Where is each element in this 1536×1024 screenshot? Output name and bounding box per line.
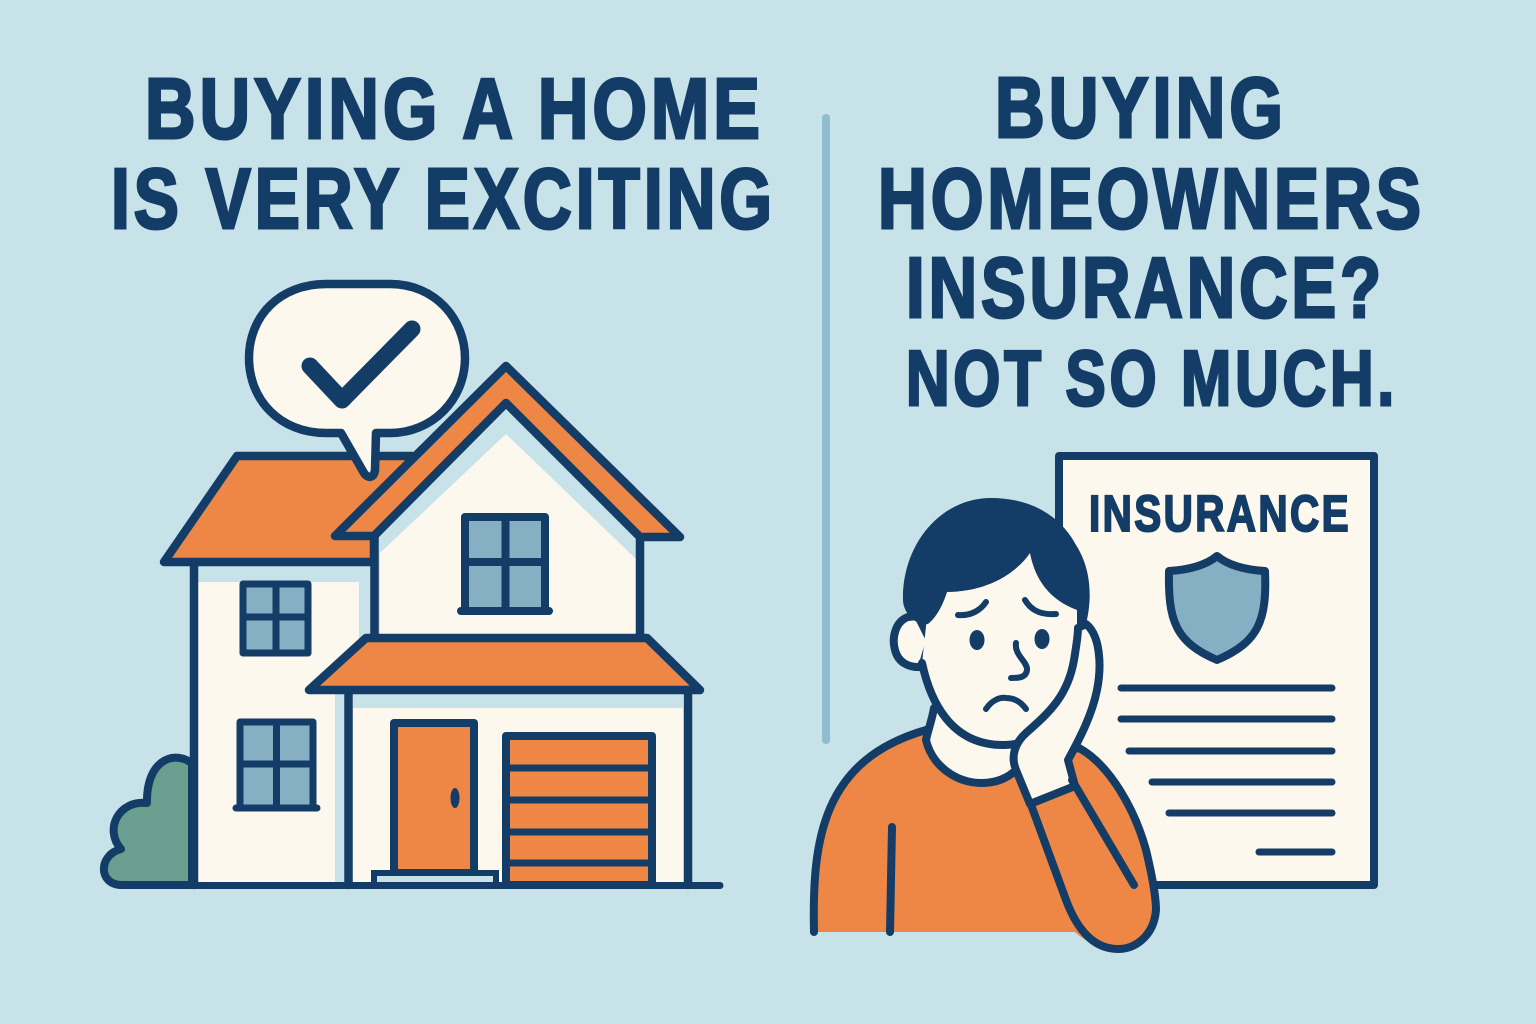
ground line bbox=[120, 882, 720, 889]
heading: buying a home: BUYING A HOME bbox=[145, 62, 764, 157]
left window upper bbox=[243, 584, 308, 653]
hair bbox=[903, 498, 1090, 630]
heading: buying homeowners insurance: NOT SO MUCH. bbox=[906, 334, 1398, 422]
mouth bbox=[986, 698, 1026, 709]
heading: buying homeowners insurance bbox=[878, 61, 1425, 422]
left tower wall bbox=[194, 562, 374, 886]
sweater bbox=[814, 730, 1156, 949]
hand on cheek bbox=[1014, 624, 1099, 804]
face bbox=[922, 540, 1080, 745]
sweater seam bbox=[890, 827, 892, 932]
nose bbox=[1011, 643, 1027, 678]
front door bbox=[394, 723, 474, 873]
neck bbox=[926, 708, 1030, 783]
left window lower bbox=[236, 722, 317, 808]
gable roof bbox=[335, 366, 680, 537]
divider bbox=[822, 114, 830, 744]
sweater outline bbox=[814, 730, 1156, 949]
bush bbox=[104, 758, 192, 885]
door step bbox=[374, 873, 496, 885]
porch roof bbox=[309, 638, 700, 690]
heading: buying homeowners insurance: BUYING bbox=[995, 61, 1287, 156]
heading: buying a home bbox=[111, 62, 776, 247]
document page bbox=[1059, 456, 1374, 885]
document title: INSURANCE bbox=[1089, 485, 1351, 542]
eyebrows bbox=[958, 600, 1056, 615]
eyes bbox=[970, 629, 1050, 650]
forearm line bbox=[1072, 780, 1134, 885]
heading: buying homeowners insurance: INSURANCE? bbox=[906, 241, 1385, 336]
gable window bbox=[461, 517, 549, 611]
illustration: house bbox=[104, 284, 720, 886]
heading: buying a home: IS VERY EXCITING bbox=[111, 152, 776, 247]
gable wall bbox=[374, 403, 640, 638]
garage door bbox=[506, 736, 652, 885]
illustration: insurance document bbox=[1059, 456, 1374, 885]
shield icon bbox=[1169, 556, 1265, 660]
speech bubble with check mark bbox=[249, 284, 465, 477]
check mark bbox=[310, 329, 412, 400]
document text lines bbox=[1121, 688, 1332, 852]
ear bbox=[894, 616, 930, 667]
left roof bbox=[164, 456, 412, 562]
illustration: worried person bbox=[814, 498, 1156, 949]
garage wall bbox=[348, 690, 688, 885]
